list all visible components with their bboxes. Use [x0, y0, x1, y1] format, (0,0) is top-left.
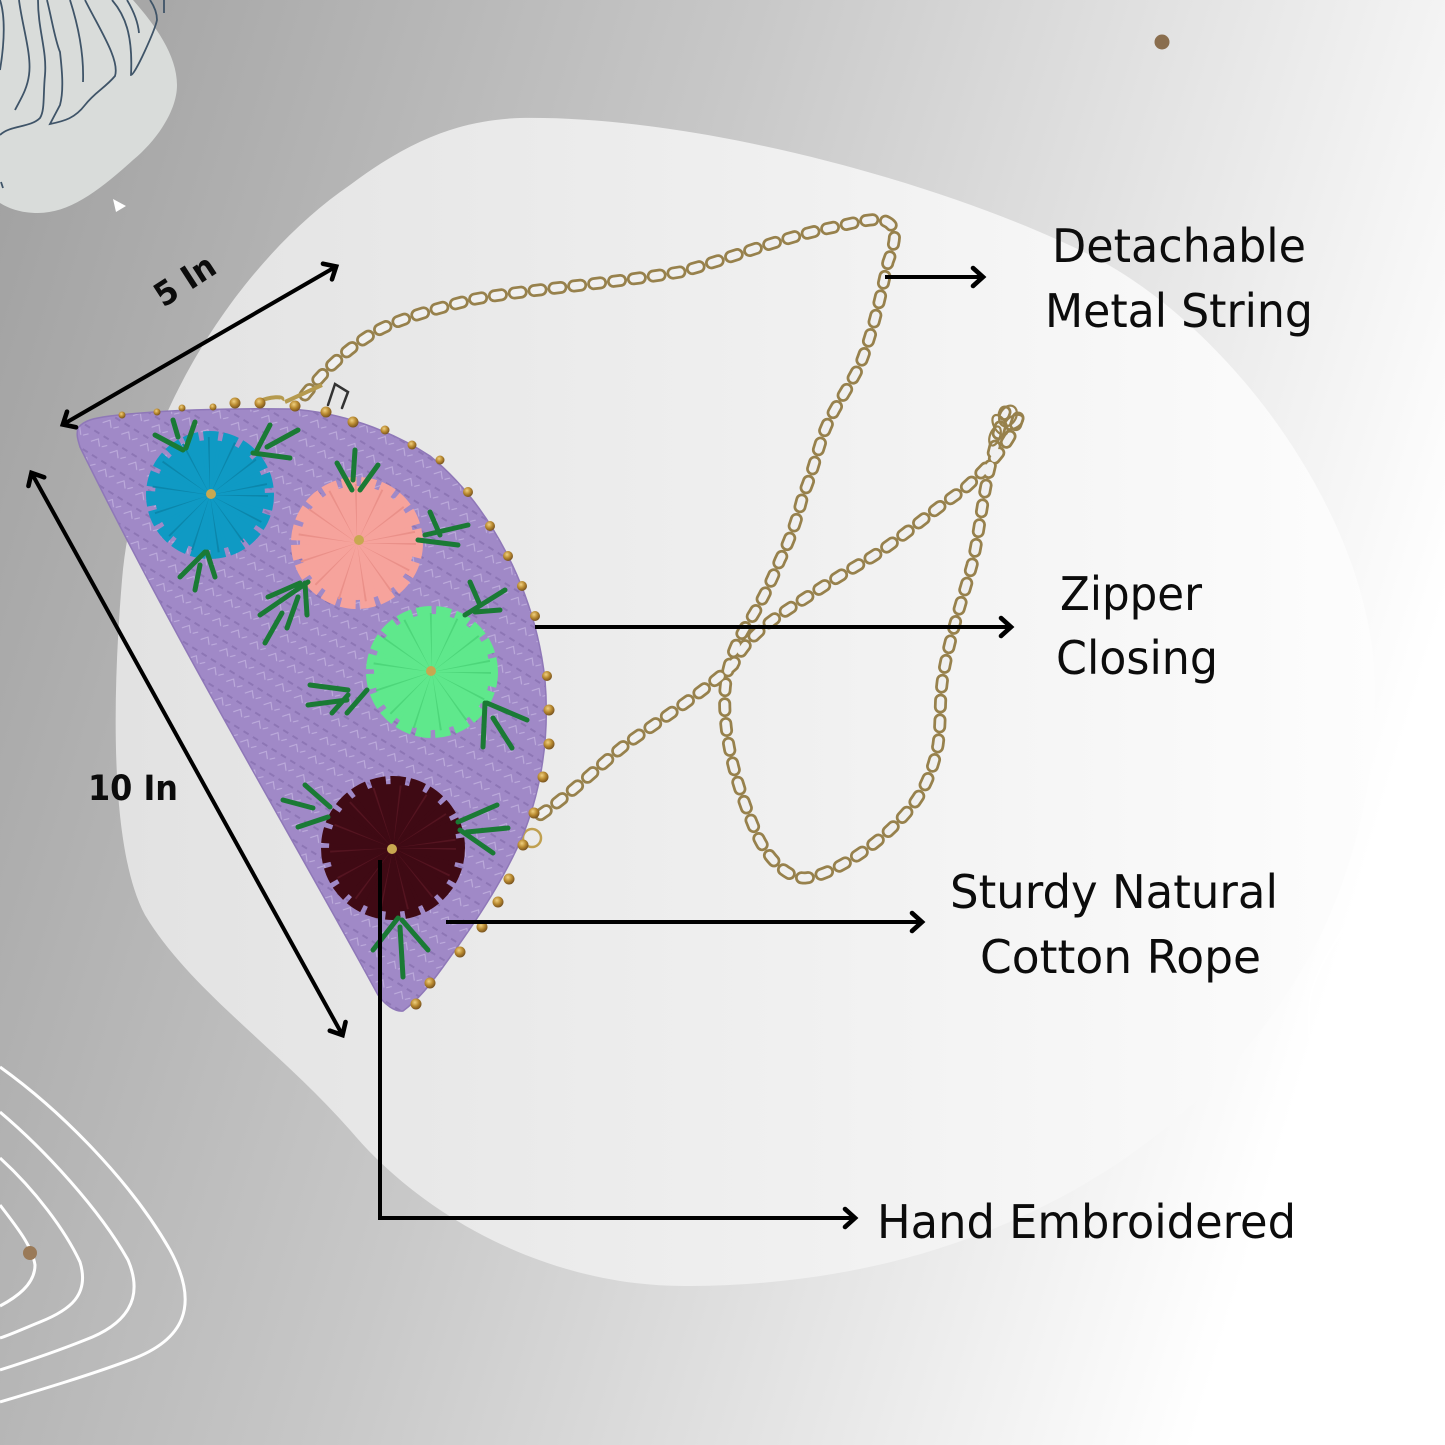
flower: pink — [300, 486, 414, 600]
label: 10 In: 10 In — [88, 769, 178, 809]
arrow: bag height 10 in — [31, 472, 343, 1036]
bag — [77, 398, 554, 1011]
clasp and zipper pull — [258, 385, 322, 402]
arrow — [535, 625, 1012, 629]
label: Zipper — [1060, 567, 1202, 621]
white blob panel — [116, 118, 1375, 1286]
chain knot — [987, 402, 1026, 447]
metal chain — [258, 220, 1026, 878]
label: Closing — [1056, 631, 1218, 685]
arrow — [380, 860, 856, 1218]
beads — [118, 398, 554, 1010]
flower: green — [374, 614, 490, 730]
decoration: dot top right — [1154, 34, 1170, 50]
flower: blue — [155, 440, 265, 550]
callout: hand embroidered — [380, 860, 1296, 1249]
label: Hand Embroidered — [877, 1195, 1296, 1249]
callout: sturdy natural cotton rope — [446, 865, 1278, 984]
decoration: dot bottom left — [23, 1246, 37, 1260]
label: Sturdy Natural — [950, 865, 1278, 919]
arrow — [885, 275, 984, 279]
arrow — [446, 920, 923, 924]
decoration: contour lines right — [1308, 810, 1445, 1220]
callout: zipper closing — [535, 567, 1218, 685]
label: Metal String — [1045, 284, 1313, 338]
decoration: contour lines bottom left — [0, 1067, 185, 1402]
bag body — [77, 409, 546, 1011]
arrow: bag width 5 in — [62, 266, 337, 425]
flower: maroon — [329, 784, 457, 912]
label: Cotton Rope — [980, 930, 1261, 984]
label: Detachable — [1052, 219, 1306, 273]
label: 5 In: 5 In — [146, 246, 223, 315]
callout: detachable metal string — [885, 219, 1313, 338]
embroidered leaves — [155, 420, 527, 977]
decoration: shell top left — [0, 0, 177, 213]
